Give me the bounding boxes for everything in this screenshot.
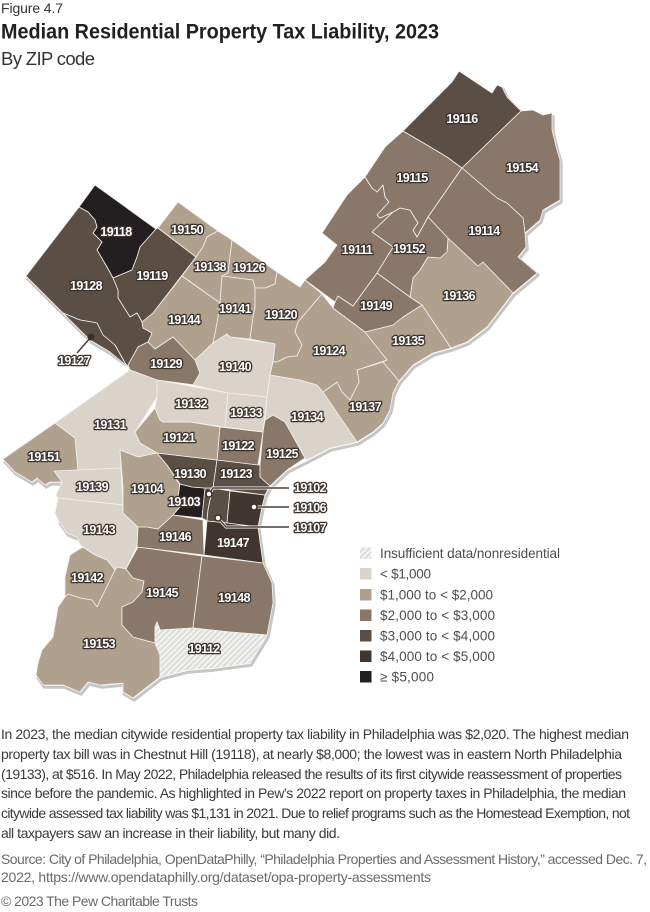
ZIP code labels: 19138 xyxy=(194,260,227,274)
ZIP code labels: 19140 xyxy=(219,360,252,374)
ZIP code labels xyxy=(28,112,539,656)
subtitle: By ZIP code xyxy=(1,48,95,69)
ZIP code labels: 19152 xyxy=(393,242,426,256)
body paragraph xyxy=(1,726,630,841)
ZIP code labels: 19112 xyxy=(188,642,220,656)
ZIP code labels: 19122 xyxy=(222,439,255,453)
ZIP code labels: 19129 xyxy=(150,357,183,371)
map shadow: river edges xyxy=(4,87,561,700)
ZIP code labels: 19148 xyxy=(218,591,251,605)
ZIP code labels: 19120 xyxy=(265,308,298,322)
ZIP code labels: 19116 xyxy=(446,112,478,126)
legend: $3,000 to $4,000: $3,000 to < $4,000 xyxy=(380,628,495,644)
ZIP code labels: 19107 xyxy=(294,521,327,535)
ZIP code labels: 19118 xyxy=(100,225,132,239)
source note xyxy=(1,851,647,885)
ZIP code labels: 19136 xyxy=(443,289,476,303)
ZIP code labels: 19121 xyxy=(163,431,196,445)
body paragraph: property tax bill was in Chestnut Hill (19118), at nearly $8,000; the lowest was in eastern North Philadelphia xyxy=(1,746,622,762)
ZIP code labels: 19128 xyxy=(70,279,103,293)
leader lines xyxy=(77,334,289,527)
legend: $2,000 to $3,000: $2,000 to < $3,000 xyxy=(380,608,495,623)
ZIP code labels: 19126 xyxy=(233,261,266,275)
ZIP code labels: 19130 xyxy=(174,467,207,481)
ZIP code labels: 19146 xyxy=(159,530,192,544)
source note: Source: City of Philadelphia, OpenDataPhilly, “Philadelphia Properties and Assessment History,” accessed Dec. 7, xyxy=(1,851,647,867)
ZIP code labels: 19149 xyxy=(360,299,393,313)
ZIP code labels: 19131 xyxy=(94,418,127,432)
ZIP code labels: 19153 xyxy=(83,637,116,651)
ZIP code areas xyxy=(3,71,560,698)
legend: under $1,000: < $1,000 xyxy=(380,566,431,582)
ZIP code labels: 19123 xyxy=(220,467,253,481)
ZIP code labels: 19104 xyxy=(131,482,164,496)
legend: $4,000 to $5,000: $4,000 to < $5,000 xyxy=(380,649,495,664)
ZIP code labels: 19135 xyxy=(392,334,425,348)
legend xyxy=(360,546,560,684)
ZIP code labels: 19125 xyxy=(266,447,299,461)
ZIP code labels: 19119 xyxy=(136,269,168,283)
body paragraph: all taxpayers saw an increase in their liability, but many did. xyxy=(1,825,340,841)
ZIP code labels: 19147 xyxy=(217,536,250,550)
ZIP code labels: 19102 xyxy=(294,481,327,495)
ZIP code labels: 19143 xyxy=(83,523,116,537)
ZIP code labels: 19137 xyxy=(349,400,382,414)
legend: $5,000 and over: ≥ $5,000 xyxy=(380,670,434,684)
ZIP code labels: 19114 xyxy=(468,224,500,238)
ZIP code labels: 19124 xyxy=(313,344,346,358)
ZIP code labels: 19154 xyxy=(506,161,539,175)
copyright: © 2023 The Pew Charitable Trusts xyxy=(1,893,198,909)
ZIP code labels: 19142 xyxy=(71,571,104,585)
ZIP code labels: 19115 xyxy=(396,171,428,185)
source note: 2022, https://www.opendataphilly.org/dataset/opa-property-assessments xyxy=(1,869,431,885)
ZIP code labels: 19103 xyxy=(168,495,201,509)
body paragraph: citywide assessed tax liability was $1,131 in 2021. Due to relief programs such as the Homestead Exemption, not xyxy=(1,805,630,821)
body paragraph: (19133), at $516. In May 2022, Philadelphia released the results of its first citywide reassessment of properties xyxy=(1,766,622,782)
ZIP code labels: 19150 xyxy=(171,223,204,237)
legend: insufficient data: Insufficient data/nonresidential xyxy=(380,546,560,561)
ZIP code labels: 19145 xyxy=(146,586,179,600)
ZIP code labels: 19127 xyxy=(58,354,91,368)
ZIP code labels: 19132 xyxy=(175,397,208,411)
title: Median Residential Property Tax Liability, 2023 xyxy=(1,20,439,44)
ZIP code labels: 19133 xyxy=(230,406,263,420)
ZIP code labels: 19144 xyxy=(168,313,201,327)
ZIP code labels: 19134 xyxy=(291,410,324,424)
ZIP code labels: 19111 xyxy=(342,243,373,257)
figure number: Figure 4.7 xyxy=(1,0,63,16)
map: Philadelphia ZIP codes xyxy=(3,71,561,700)
body paragraph: In 2023, the median citywide residential property tax liability in Philadelphia was $2,020. The highest median xyxy=(1,726,629,742)
legend: $1,000 to $2,000: $1,000 to < $2,000 xyxy=(380,588,493,602)
ZIP code labels: 19139 xyxy=(76,480,109,494)
ZIP code labels: 19141 xyxy=(219,302,252,316)
body paragraph: since before the pandemic. As highlighted in Pew’s 2022 report on property taxes in Philadelphia, the median xyxy=(1,785,626,801)
ZIP code labels: 19151 xyxy=(28,450,61,464)
ZIP code labels: 19106 xyxy=(294,501,327,515)
